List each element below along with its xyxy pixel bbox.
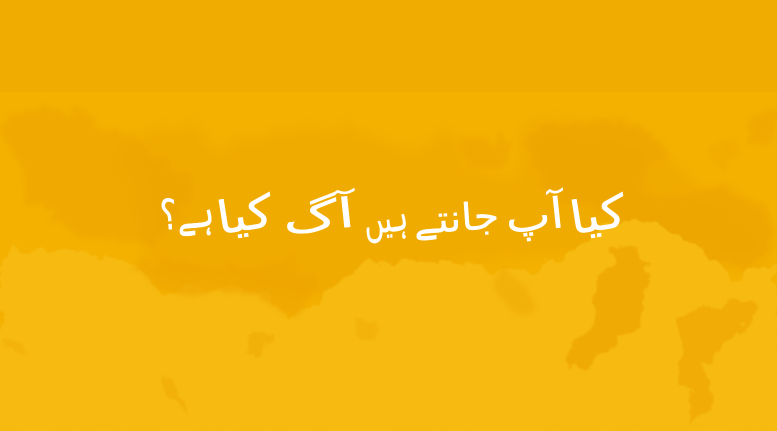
title: Urdu question: آگ [280,187,360,244]
lower background [0,92,777,431]
title: Urdu question: کیا [566,186,631,246]
smoke clouds: lower dark streaks [2,245,758,426]
title: Urdu question: ہے؟ [158,187,216,240]
smoke clouds: light lower layer [0,222,777,431]
title: Urdu question: کیا [213,186,278,246]
top colour band [0,0,777,92]
title: Urdu question: ہیں [361,194,410,244]
title: Urdu question: آپ [503,187,568,243]
title: Urdu question [158,186,631,246]
smoke clouds: upper dark layer [5,105,777,300]
title: Urdu question: جانتے [412,194,501,244]
